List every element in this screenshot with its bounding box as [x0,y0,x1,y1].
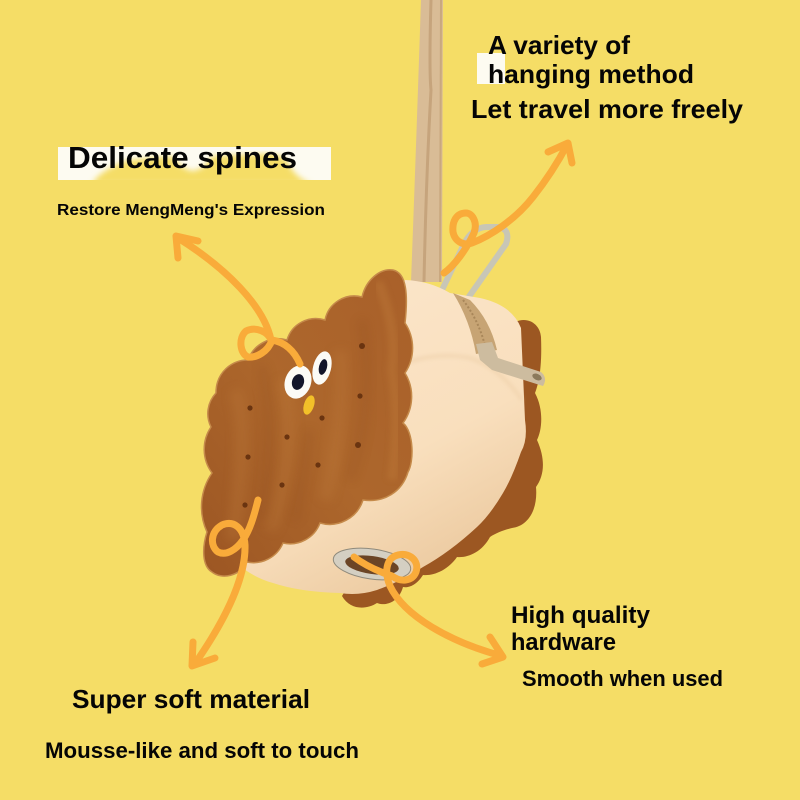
heading: hardware: hardware [511,629,616,656]
metal eyelet [331,544,413,584]
heading: hanging method: hanging method [488,59,694,89]
heading: soft material: Super soft material [72,684,310,714]
biscuit holes [242,343,365,508]
arrow: spines [176,236,300,364]
cream body [240,280,526,594]
front biscuit [202,270,413,576]
zipper [453,293,497,354]
zipper pull [476,342,545,386]
arrow: material [192,500,258,666]
subtext: travel: Let travel more freely [471,94,744,124]
subtext: smooth: Smooth when used [522,666,723,691]
metal hook [442,227,507,298]
subtext: expression: Restore MengMeng's Expression [57,202,325,219]
arrow: hanging [444,143,572,273]
body fold shadow [408,356,522,400]
white patch behind second title line [477,50,521,86]
beak [301,394,317,416]
arrow: hardware [354,554,503,664]
back biscuit [342,320,543,608]
eyes [280,362,316,402]
heading: hanging method [488,30,694,89]
biscuit plush shading [378,286,397,458]
heading: hardware: High quality [511,602,651,629]
heading: delicate spines: Delicate spines [68,140,297,175]
heading: hanging method: A variety of [488,30,630,60]
subtext: soft to touch: Mousse-like and soft to touch [45,738,359,763]
white patch behind heading [50,147,340,190]
heading: hardware [511,602,651,656]
product: biscuit pouch [202,0,545,608]
strap [411,0,443,282]
